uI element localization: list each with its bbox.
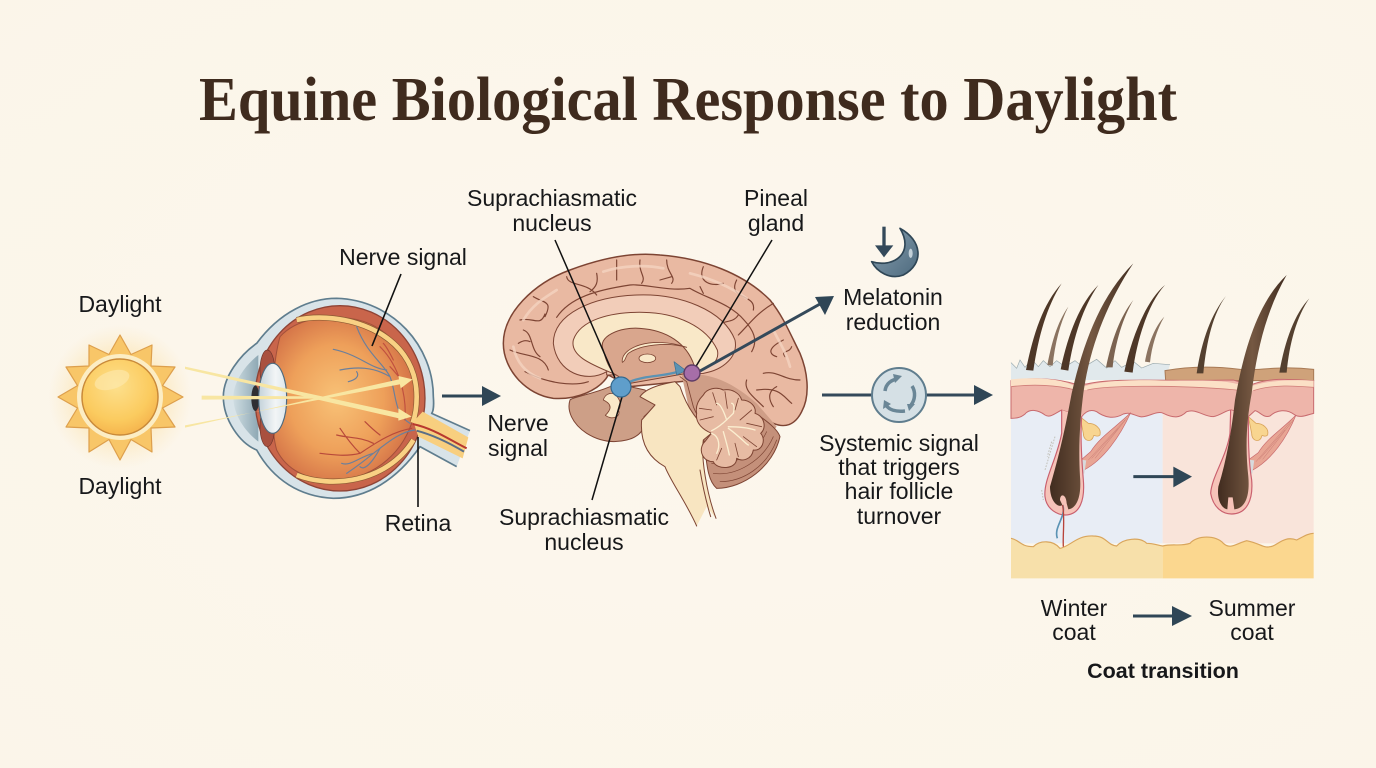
fornix	[622, 342, 687, 362]
midbrain tissue	[682, 374, 777, 453]
label: suprachiasmatic top: Suprachiasmatic	[467, 185, 637, 211]
arrow: systemic signal	[822, 385, 993, 405]
optic nerve	[413, 412, 468, 458]
light rays	[185, 367, 413, 428]
brainstem	[640, 382, 716, 526]
muscle right	[1248, 415, 1296, 471]
epidermis strip	[1011, 378, 1314, 391]
ventricle	[573, 312, 718, 380]
label: melatonin reduction	[843, 284, 943, 335]
main hair left	[1050, 263, 1133, 509]
cerebral folds	[510, 260, 800, 407]
label: winter coat	[1041, 595, 1108, 645]
label: summer coat	[1209, 595, 1296, 645]
label: pineal gland: Pineal	[744, 185, 808, 211]
follicle right	[1211, 410, 1252, 514]
fat layer summer	[1163, 533, 1314, 578]
label: coat transition: Coat transition	[1087, 659, 1239, 683]
label: summer coat: coat	[1230, 619, 1274, 645]
iris top	[260, 350, 275, 390]
sebaceous gland right	[1248, 417, 1268, 440]
label: nerve signal to brain	[487, 410, 549, 461]
leader line: nerve signal to eye	[372, 274, 401, 346]
winter fur layer	[1011, 359, 1170, 380]
label: suprachiasmatic bottom	[499, 504, 669, 555]
label: nerve signal to brain: Nerve	[487, 410, 549, 436]
pupil	[251, 386, 259, 411]
label: systemic signal: hair follicle	[845, 478, 953, 504]
node: pineal gland	[684, 365, 700, 381]
leader line: retina	[417, 437, 419, 507]
arrow: winter to summer	[1133, 606, 1192, 626]
sebaceous gland left	[1080, 417, 1100, 440]
main hair right	[1218, 275, 1287, 509]
lens	[259, 363, 287, 433]
iris bottom	[260, 407, 275, 447]
panel arrow	[1133, 472, 1175, 481]
summer hairs	[1197, 296, 1226, 373]
cerebellum foliage	[696, 388, 764, 468]
gyri highlights	[513, 266, 790, 378]
arrow: eye to brain	[442, 386, 501, 406]
temporal lobe	[569, 387, 657, 442]
label: pineal gland	[744, 185, 808, 236]
label: nerve signal to brain: signal	[488, 435, 548, 461]
label: winter coat: coat	[1052, 619, 1096, 645]
title: Equine Biological Response to Daylight	[199, 66, 1177, 134]
label: suprachiasmatic bottom: nucleus	[544, 529, 624, 555]
icon: sun	[48, 325, 192, 469]
label: daylight top: Daylight	[78, 291, 162, 317]
label: summer coat: Summer	[1209, 595, 1296, 621]
label: melatonin reduction: reduction	[846, 309, 940, 335]
dermis	[1011, 379, 1314, 418]
label: systemic signal: that triggers	[838, 454, 960, 480]
fat layer winter	[1011, 536, 1163, 578]
arrow: pineal to melatonin	[700, 296, 834, 371]
shed fuzz left	[1042, 437, 1055, 500]
cerebellum back	[703, 407, 780, 488]
icon: moon with down arrow	[872, 227, 918, 276]
vessels left	[1057, 505, 1063, 538]
label: systemic signal: turnover	[857, 503, 942, 529]
label: suprachiasmatic top: nucleus	[512, 210, 592, 236]
label: systemic signal	[819, 430, 979, 529]
eye cross-section	[185, 298, 470, 498]
summer background	[1163, 410, 1314, 543]
leader line: suprachiasmatic bottom	[592, 397, 622, 500]
optic chiasm shapes	[603, 393, 620, 418]
thalamus	[602, 328, 694, 383]
label: suprachiasmatic bottom: Suprachiasmatic	[499, 504, 669, 530]
label: pineal gland: gland	[748, 210, 804, 236]
blood vessels	[320, 327, 415, 473]
label: retina: Retina	[385, 510, 451, 536]
corpus callosum band	[553, 295, 735, 376]
summer coat layer	[1165, 367, 1314, 381]
skin panel: coat transition	[1011, 263, 1314, 578]
label: suprachiasmatic top	[467, 185, 637, 236]
brain cross-section	[503, 254, 807, 526]
label: nerve signal over eye: Nerve signal	[339, 244, 467, 270]
leader line: suprachiasmatic top	[555, 240, 615, 378]
interthalamic oval	[639, 354, 656, 363]
nerve path arrow	[630, 372, 678, 382]
icon: cycle circle	[872, 368, 926, 422]
winter background	[1011, 410, 1163, 543]
label: winter coat: Winter	[1041, 595, 1108, 621]
leader line: pineal gland	[695, 240, 772, 368]
label: systemic signal: Systemic signal	[819, 430, 979, 456]
follicle left	[1045, 410, 1084, 515]
label: melatonin reduction: Melatonin	[843, 284, 943, 310]
node: suprachiasmatic nucleus	[611, 377, 631, 397]
winter hairs	[1026, 283, 1062, 371]
label: daylight bottom: Daylight	[78, 473, 162, 499]
muscle left	[1081, 413, 1131, 470]
